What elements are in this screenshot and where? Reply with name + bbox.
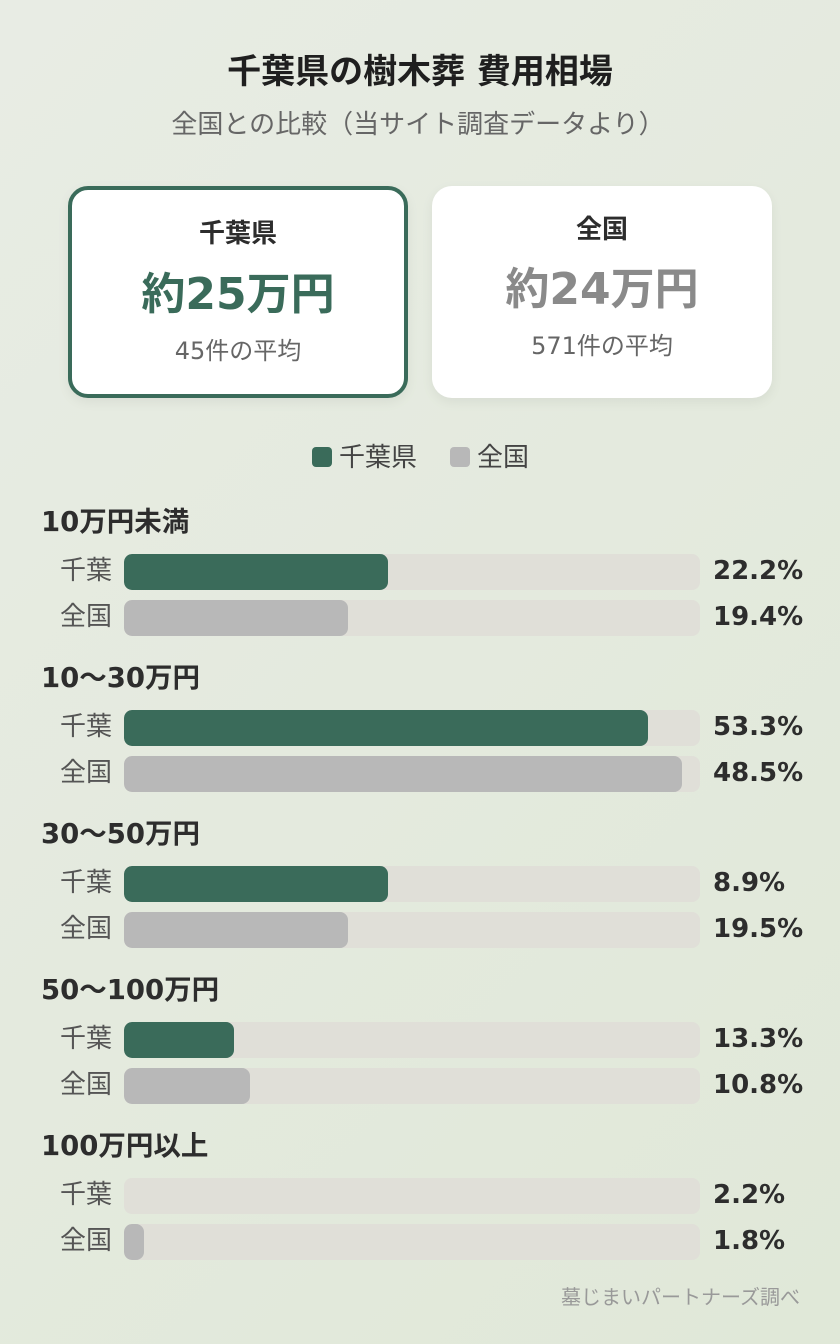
value: Chiba: 53.3% bbox=[713, 712, 803, 742]
legend bbox=[312, 443, 529, 473]
panel: Chiba summary card bbox=[68, 186, 408, 398]
label: national: 全国 bbox=[60, 914, 112, 944]
title: 千葉県の樹木葬 費用相場 bbox=[227, 52, 613, 92]
group heading: 10万円未満 bbox=[41, 506, 189, 538]
value: national: 19.5% bbox=[713, 914, 803, 944]
bar: national 10.8% bbox=[124, 1068, 700, 1104]
value: Chiba: 8.9% bbox=[713, 868, 785, 898]
bar: national 19.5% bbox=[124, 912, 700, 948]
label: national: 全国 bbox=[60, 602, 112, 632]
bar: national 48.5% bbox=[124, 756, 700, 792]
label: national: 全国 bbox=[60, 1226, 112, 1256]
panel: national summary card bbox=[432, 186, 772, 398]
value: national: 48.5% bbox=[713, 758, 803, 788]
label: Chiba: 千葉 bbox=[60, 1024, 112, 1054]
bar: Chiba 2.2% bbox=[124, 1178, 700, 1214]
bar group: under 100k yen bbox=[41, 506, 803, 636]
group heading: 50～100万円 bbox=[41, 974, 219, 1006]
card note: national sample: 571件の平均 bbox=[531, 332, 673, 360]
bar: Chiba 13.3% bbox=[124, 1022, 700, 1058]
group heading: 30～50万円 bbox=[41, 818, 200, 850]
legend label: Chiba: 千葉県 bbox=[339, 443, 417, 473]
group heading: 10～30万円 bbox=[41, 662, 200, 694]
value: national: 10.8% bbox=[713, 1070, 803, 1100]
value: national: 19.4% bbox=[713, 602, 803, 632]
value: national: 1.8% bbox=[713, 1226, 785, 1256]
label: national: 全国 bbox=[60, 758, 112, 788]
bar group: over 1M yen bbox=[41, 1130, 785, 1260]
card note: Chiba sample: 45件の平均 bbox=[175, 337, 301, 365]
bar group: 300-500k yen bbox=[41, 818, 803, 948]
legend swatch: national bbox=[450, 447, 470, 467]
value: Chiba: 2.2% bbox=[713, 1180, 785, 1210]
card value: Chiba average: 約25万円 bbox=[141, 269, 335, 320]
bar: Chiba 22.2% bbox=[124, 554, 700, 590]
label: Chiba: 千葉 bbox=[60, 868, 112, 898]
card heading: national: 全国 bbox=[576, 215, 628, 245]
source note: 墓じまいパートナーズ調べ bbox=[561, 1285, 800, 1309]
subtitle: 全国との比較（当サイト調査データより） bbox=[171, 110, 665, 140]
bar: national 19.4% bbox=[124, 600, 700, 636]
label: national: 全国 bbox=[60, 1070, 112, 1100]
bar: Chiba 53.3% bbox=[124, 710, 700, 746]
label: Chiba: 千葉 bbox=[60, 556, 112, 586]
value: Chiba: 13.3% bbox=[713, 1024, 803, 1054]
bar: Chiba 8.9% bbox=[124, 866, 700, 902]
card value: national average: 約24万円 bbox=[505, 264, 699, 315]
label: Chiba: 千葉 bbox=[60, 1180, 112, 1210]
bar: national 1.8% bbox=[124, 1224, 700, 1260]
legend label: national: 全国 bbox=[477, 443, 529, 473]
label: Chiba: 千葉 bbox=[60, 712, 112, 742]
legend swatch: Chiba bbox=[312, 447, 332, 467]
bar group: 500k-1M yen bbox=[41, 974, 803, 1104]
bar group: 100-300k yen bbox=[41, 662, 803, 792]
value: Chiba: 22.2% bbox=[713, 556, 803, 586]
group heading: 100万円以上 bbox=[41, 1130, 208, 1162]
card heading: Chiba: 千葉県 bbox=[199, 219, 277, 249]
